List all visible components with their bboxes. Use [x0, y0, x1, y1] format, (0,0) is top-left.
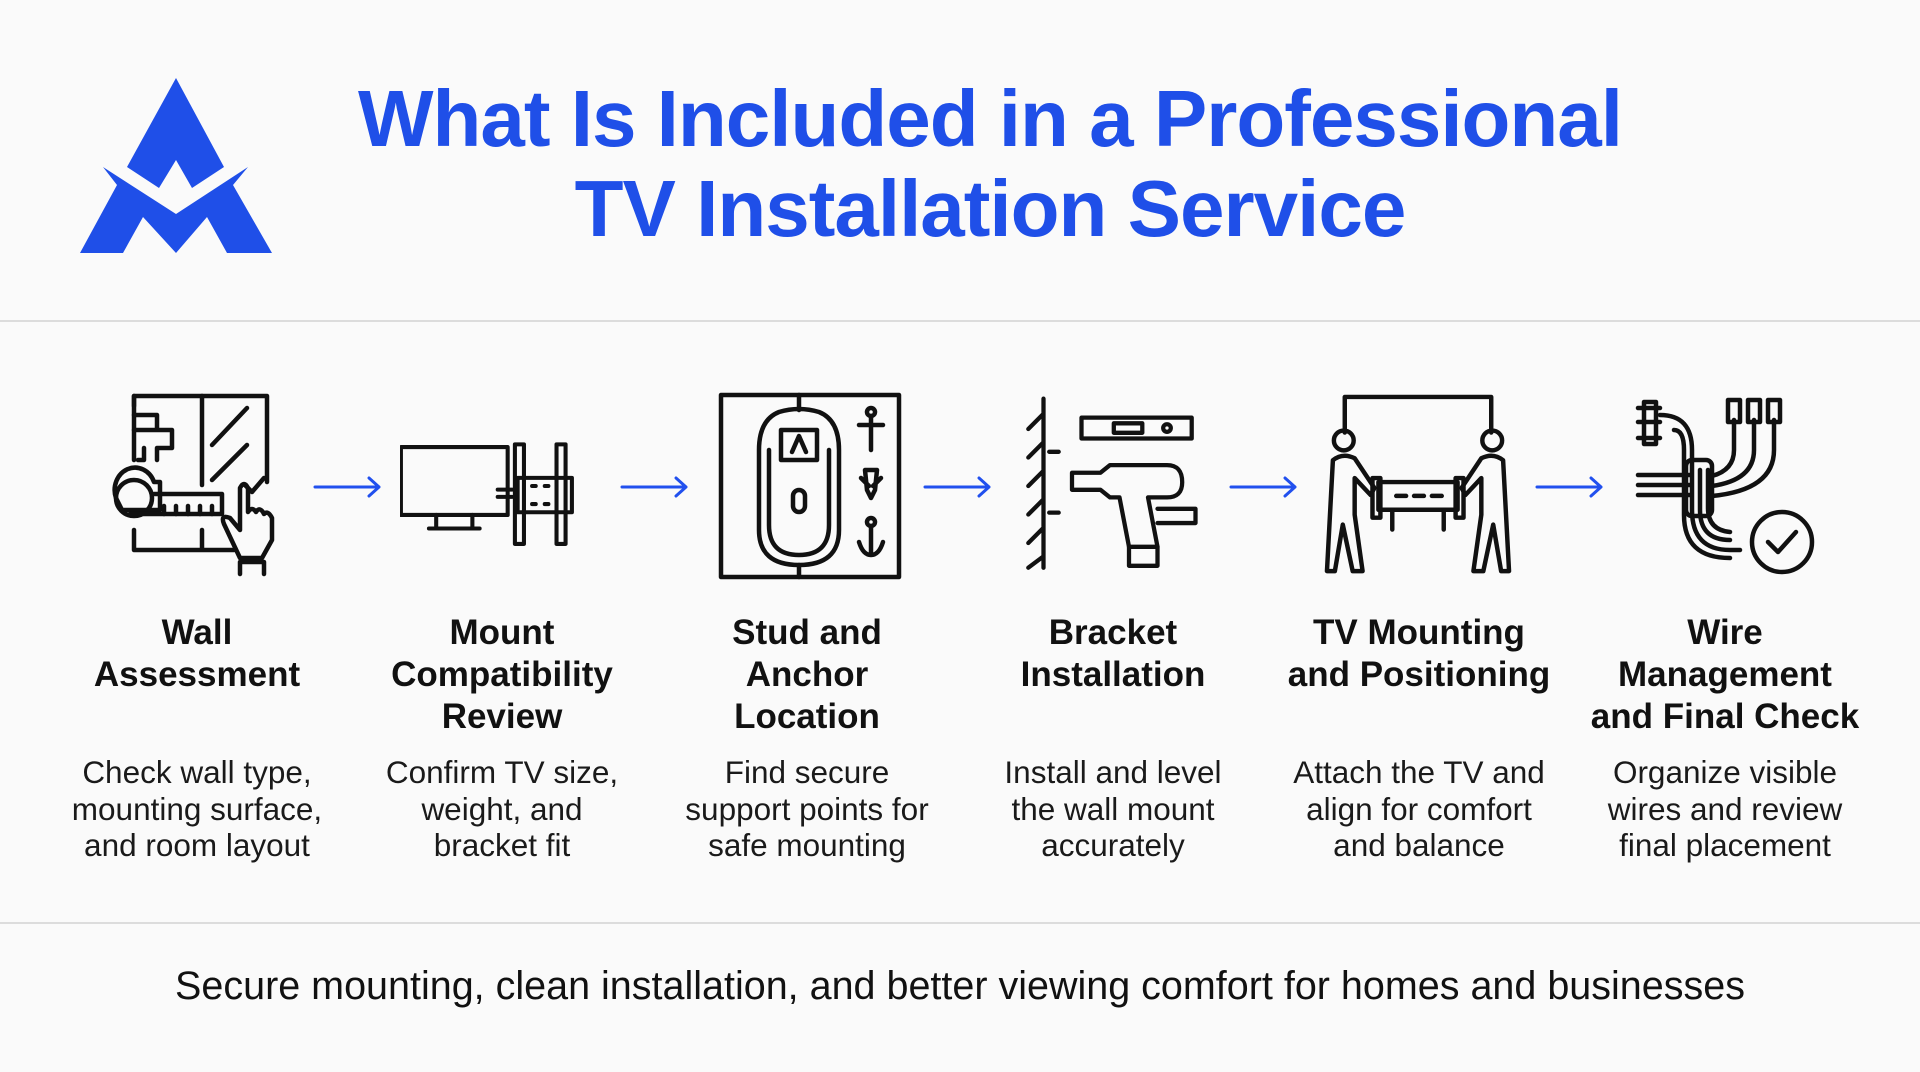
text: Management [1618, 655, 1832, 694]
text: final placement [1619, 827, 1831, 863]
text: Find secure [725, 754, 889, 790]
text: Install and level [1004, 754, 1222, 790]
text: TV Mounting [1313, 613, 1525, 652]
text: Bracket [1049, 613, 1177, 652]
icon: mount compatibility [400, 442, 574, 546]
title: TV Installation Service [575, 164, 1405, 253]
text: the wall mount [1011, 790, 1215, 826]
text: Wire [1687, 613, 1763, 652]
text: Anchor [746, 655, 868, 694]
text: Stud and [732, 613, 882, 652]
text: wires and review [1608, 790, 1842, 826]
arrow 3 [924, 476, 991, 498]
text: Installation [1021, 655, 1205, 694]
arrow 1 [314, 476, 381, 498]
text: align for comfort [1306, 790, 1532, 826]
title [358, 74, 1622, 253]
text: Attach the TV and [1293, 754, 1545, 790]
text: and Final Check [1591, 697, 1859, 736]
text: bracket fit [434, 827, 570, 863]
title: What Is Included in a Professional [358, 74, 1622, 163]
steps: descriptions: Check wall type, [82, 754, 312, 790]
text: Review [442, 697, 562, 736]
icon: wire management [1636, 398, 1814, 574]
steps: headings: Assessment [94, 655, 300, 694]
text: Mount [450, 613, 554, 652]
icon: stud finder [718, 392, 902, 580]
steps: descriptions [72, 754, 322, 863]
text: accurately [1041, 827, 1185, 863]
icon: bracket installation [1026, 396, 1198, 570]
text: Confirm TV size, [386, 754, 618, 790]
steps: descriptions: mounting surface, [72, 790, 322, 826]
text: Organize visible [1613, 754, 1837, 790]
text: Location [734, 697, 880, 736]
text: support points for [685, 790, 929, 826]
text: weight, and [421, 790, 583, 826]
arrow 5 [1536, 476, 1603, 498]
text: and balance [1333, 827, 1505, 863]
text: and Positioning [1288, 655, 1550, 694]
icon: wall assessment [112, 394, 274, 576]
arrow 4 [1230, 476, 1297, 498]
text: safe mounting [708, 827, 906, 863]
steps: headings [94, 613, 300, 694]
steps: descriptions: and room layout [84, 827, 310, 863]
text: Compatibility [391, 655, 613, 694]
arrow 2 [620, 476, 688, 498]
icon: tv mounting [1324, 394, 1512, 574]
steps: headings: Wall [162, 613, 232, 652]
logo [80, 78, 272, 253]
footer tagline: Secure mounting, clean installation, and better viewing comfort for homes and businesses [175, 964, 1745, 1008]
